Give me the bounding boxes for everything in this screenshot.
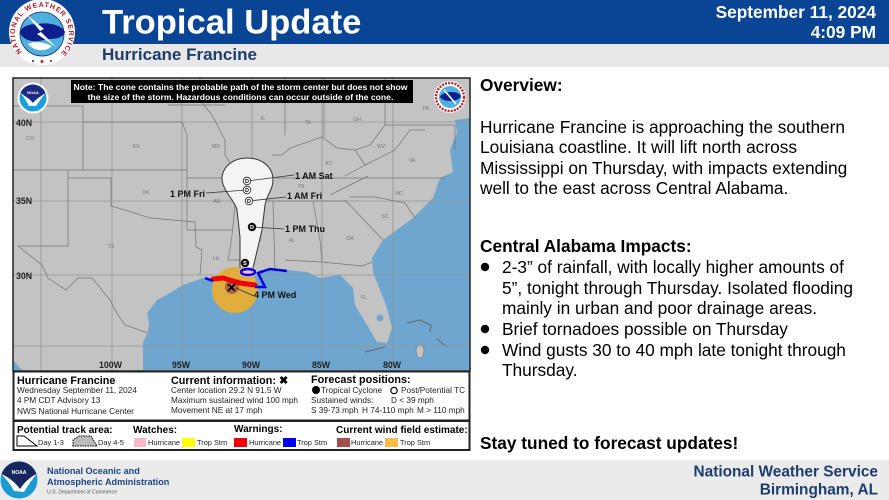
- potential track area key: Day 4-5: [98, 438, 124, 447]
- overview text: Hurricane Francine is approaching the southern: [480, 117, 845, 137]
- note box: [71, 80, 413, 103]
- footer office name: [694, 464, 878, 498]
- footer agency name: Atmospheric Administration: [47, 477, 170, 487]
- warnings key: Hurricane: [249, 438, 281, 447]
- state labels: AR: [213, 199, 221, 205]
- state labels: LA: [213, 256, 220, 262]
- forecast positions: M > 110 mph: [417, 406, 465, 415]
- forecast time labels: 1 AM Fri: [287, 191, 322, 201]
- footer agency name: U.S. Department of Commerce: [47, 490, 117, 496]
- date and time: 4:09 PM: [811, 22, 876, 42]
- state labels: IL: [261, 116, 265, 122]
- potential track area key: Potential track area:: [17, 425, 113, 436]
- forecast position markers: D: [250, 225, 254, 231]
- grid lines: [13, 78, 470, 370]
- state labels: OH: [353, 117, 361, 123]
- state labels: MS: [254, 237, 262, 243]
- impacts list: mainly in urban and poor drainage areas.: [502, 298, 817, 318]
- state labels: VA: [409, 158, 416, 164]
- wind field: [212, 267, 258, 313]
- forecast position markers: [241, 177, 256, 267]
- forecast positions: Sustained winds:: [311, 396, 373, 405]
- potential track area key: Day 1-3: [38, 438, 64, 447]
- latitude and longitude labels: 85W: [312, 360, 331, 370]
- icon: NOAA footer logo: NOAA: [12, 470, 27, 476]
- map frame: [13, 78, 470, 371]
- watches key: Trop Stm: [197, 438, 227, 447]
- icon: NOAA logo on map: NOAA: [27, 90, 39, 95]
- wind field key: Current wind field estimate:: [336, 425, 468, 436]
- current information: Center location 29.2 N 91.5 W: [171, 386, 282, 395]
- current information: [171, 375, 298, 415]
- current information: Current information: ✖: [171, 375, 288, 387]
- footer agency name: [47, 466, 170, 496]
- header bar: [0, 0, 889, 67]
- impacts list: Brief tornadoes possible on Thursday: [502, 319, 788, 339]
- footer agency name: National Oceanic and: [47, 466, 140, 476]
- map: storm track forecast cone: [13, 78, 470, 371]
- latitude and longitude labels: 95W: [172, 360, 191, 370]
- state labels: WV: [377, 144, 386, 150]
- current position marker: [228, 284, 235, 291]
- overview text: Mississippi on Thursday, with impacts extending: [480, 158, 847, 178]
- title: Tropical Update: [102, 4, 361, 42]
- state labels: NC: [395, 191, 403, 197]
- icon: National Weather Service logo: NATIONAL WEATHER SERVICE: [10, 2, 74, 56]
- note box: the size of the storm. Hazardous conditions can occur outside of the cone.: [88, 92, 393, 102]
- footer office name: Birmingham, AL: [760, 482, 878, 498]
- closing message: Stay tuned to forecast updates!: [480, 433, 738, 453]
- forecast position markers: D: [247, 199, 251, 205]
- forecast positions: H 74-110 mph: [362, 406, 414, 415]
- forecast time labels: 1 AM Sat: [295, 171, 333, 181]
- storm information: NWS National Hurricane Center: [17, 407, 134, 416]
- warning lines: [213, 278, 255, 285]
- footer bar: [0, 460, 889, 500]
- forecast positions: Forecast positions:: [311, 374, 411, 386]
- latitude and longitude labels: 90W: [242, 360, 261, 370]
- note box: Note: The cone contains the probable path of the storm center but does not show: [74, 82, 408, 92]
- latitude and longitude labels: 100W: [99, 360, 123, 370]
- warnings key: [234, 424, 327, 447]
- Florida lake and islands: [376, 314, 384, 322]
- storm information: 4 PM CDT Advisory 13: [17, 396, 101, 405]
- state labels: KS: [133, 144, 140, 150]
- forecast time labels: [170, 171, 333, 300]
- forecast leaders: [206, 175, 294, 296]
- impacts list: [481, 257, 853, 380]
- forecast time labels: 4 PM Wed: [254, 290, 296, 300]
- footer office name: National Weather Service: [694, 464, 878, 480]
- state labels: GA: [346, 236, 354, 242]
- date and time: September 11, 2024: [716, 2, 876, 22]
- storm information: [17, 375, 137, 416]
- forecast positions: S 39-73 mph: [311, 406, 359, 415]
- state labels: [26, 106, 430, 301]
- state labels: AL: [289, 238, 295, 244]
- latitude and longitude labels: 30N: [16, 271, 32, 281]
- state borders: [13, 78, 455, 333]
- latitude and longitude labels: [16, 118, 402, 370]
- impacts heading: Central Alabama Impacts:: [480, 236, 692, 256]
- current information: Movement NE at 17 mph: [171, 406, 263, 415]
- potential track area key: [17, 425, 124, 447]
- impacts list: 2-3” of rainfall, with locally higher amounts of: [502, 257, 844, 277]
- icon: NWS logo on map: [434, 81, 466, 113]
- forecast positions: D < 39 mph: [391, 396, 434, 405]
- wind field key: Trop Stm: [400, 438, 430, 447]
- latitude and longitude labels: 80W: [383, 360, 402, 370]
- overview text: [479, 117, 847, 198]
- forecast cone: [222, 158, 273, 268]
- forecast position markers: D: [245, 179, 249, 185]
- storm information: Hurricane Francine: [17, 375, 115, 387]
- forecast position markers: D: [245, 188, 249, 194]
- hurricane watch area: [239, 267, 257, 277]
- overview heading: Overview:: [480, 75, 563, 95]
- current information: Maximum sustained wind 100 mph: [171, 396, 298, 405]
- storm information: Wednesday September 11, 2024: [17, 386, 137, 395]
- state labels: KY: [326, 161, 333, 167]
- warnings key: Warnings:: [234, 424, 283, 435]
- state labels: PA: [423, 106, 430, 112]
- impacts list: Thursday.: [502, 360, 578, 380]
- watches key: Watches:: [133, 425, 177, 436]
- land base: [13, 78, 470, 371]
- subtitle: Hurricane Francine: [102, 45, 257, 64]
- overview text: Louisiana coastline. It will lift north across: [480, 137, 797, 157]
- forecast position markers: S: [243, 261, 247, 267]
- watches key: Hurricane: [148, 438, 180, 447]
- icon: NOAA logo on map: [18, 82, 48, 114]
- impacts list: 5”, tonight through Thursday. Isolated flooding: [502, 278, 853, 298]
- forecast time labels: 1 PM Thu: [285, 224, 325, 234]
- date and time: [716, 2, 876, 42]
- state labels: CO: [26, 136, 34, 142]
- warnings key: Trop Stm: [297, 438, 327, 447]
- watches key: [133, 425, 227, 447]
- map legend: [14, 372, 470, 450]
- state labels: IN: [305, 120, 311, 126]
- impacts list: Wind gusts 30 to 40 mph late tonight through: [502, 340, 846, 360]
- state labels: SC: [381, 214, 389, 220]
- forecast positions: Post/Potential TC: [401, 386, 465, 395]
- ocean: [143, 118, 470, 370]
- state labels: OK: [142, 190, 150, 196]
- forecast positions: Tropical Cyclone: [321, 386, 383, 395]
- wind field key: [336, 425, 468, 447]
- forecast time labels: 1 PM Fri: [170, 189, 205, 199]
- overview text: well to the east across Central Alabama.: [479, 178, 788, 198]
- state labels: TX: [108, 244, 115, 250]
- state labels: TN: [298, 184, 305, 190]
- forecast positions: [311, 374, 465, 415]
- state labels: FL: [361, 295, 367, 301]
- latitude and longitude labels: 40N: [16, 118, 32, 128]
- latitude and longitude labels: 35N: [16, 196, 32, 206]
- state labels: MO: [212, 144, 220, 150]
- icon: NOAA footer logo: [0, 462, 38, 498]
- wind field key: Hurricane: [351, 438, 383, 447]
